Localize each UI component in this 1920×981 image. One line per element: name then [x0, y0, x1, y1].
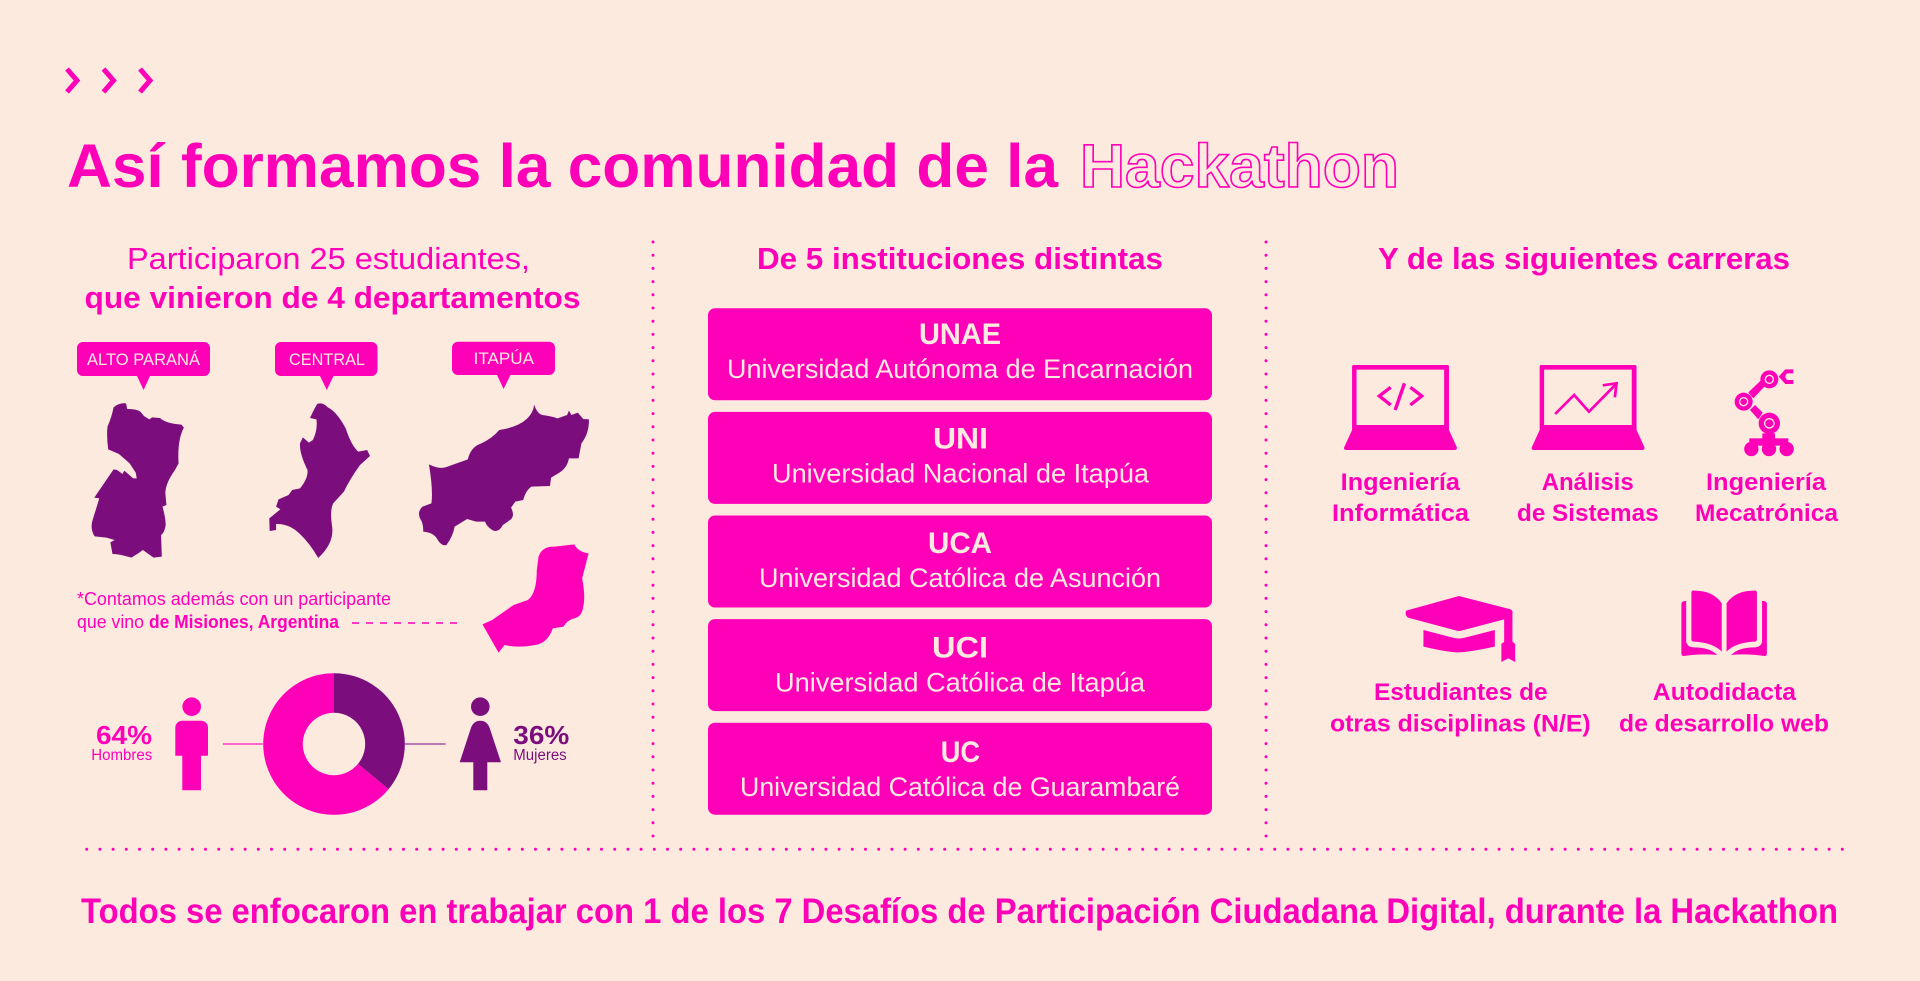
line: men connector [223, 743, 263, 745]
note: participant from Misiones: que vino [77, 612, 144, 632]
card: UNI [708, 412, 1212, 504]
heading: careers: Y de las siguientes carreras [1378, 241, 1790, 276]
callout: Central: CENTRAL [289, 350, 365, 369]
callout: Alto Paraná: ALTO PARANÁ [87, 350, 201, 369]
label: Autodidacta de desarrollo web: Autodidacta [1653, 679, 1797, 706]
card: UNAE: Universidad Autónoma de Encarnación [727, 354, 1193, 384]
card: UCI: UCI [932, 632, 988, 664]
map: Alto Paraná [92, 403, 184, 558]
card: UCI: Universidad Católica de Itapúa [775, 668, 1146, 698]
label: Ingeniería Mecatrónica [1695, 469, 1839, 527]
note: participant from Misiones: de Misiones, Argentina [149, 612, 340, 632]
stat: men 64% [91, 720, 153, 764]
stat: men 64%: 64% [96, 720, 152, 750]
card: UNI: UNI [933, 422, 988, 456]
icon: laptop with code [1344, 365, 1457, 450]
icon: graduation cap [1406, 596, 1515, 662]
callout: Alto Paraná [77, 342, 210, 390]
label: Ingeniería Mecatrónica: Mecatrónica [1695, 500, 1839, 527]
card: UC [708, 723, 1212, 815]
icon: woman [460, 697, 501, 790]
map: Central [269, 403, 370, 558]
panel: institutions [708, 241, 1212, 815]
donut chart [263, 673, 405, 815]
callout: Itapúa [452, 342, 555, 389]
icon: robot arm [1735, 369, 1794, 456]
label: Análisis de Sistemas: Análisis [1542, 469, 1634, 496]
note: participant from Misiones [77, 589, 458, 632]
label: Estudiantes de otras disciplinas: Estudiantes de [1374, 679, 1548, 706]
label: Ingeniería Mecatrónica: Ingeniería [1706, 469, 1827, 496]
card: UCA: UCA [928, 527, 992, 560]
heading: participants: que vinieron de 4 departamentos [84, 280, 580, 315]
stat: women 36%: Mujeres [513, 747, 567, 764]
card: UNI: Universidad Nacional de Itapúa [772, 458, 1150, 488]
icon: open book [1681, 591, 1767, 656]
card: UCA [708, 516, 1212, 608]
label: Ingeniería Informática: Ingeniería [1341, 469, 1461, 496]
icon: laptop with chart [1532, 365, 1645, 450]
label: Ingeniería Informática: Informática [1332, 500, 1470, 527]
stat: women 36%: 36% [513, 720, 569, 750]
label: Estudiantes de otras disciplinas: otras disciplinas (N/E) [1330, 710, 1591, 738]
callout: Itapúa: ITAPÚA [474, 349, 535, 368]
card: UC: Universidad Católica de Guarambaré [740, 772, 1180, 802]
card: UNAE [708, 308, 1212, 400]
title: Hackathon [1080, 132, 1399, 200]
heading: participants: Participaron 25 estudiantes, [127, 241, 530, 276]
label: Análisis de Sistemas [1517, 469, 1659, 527]
map: Itapúa [419, 405, 589, 545]
panel: participants [77, 241, 589, 815]
line: women connector [405, 743, 446, 745]
card: UC: UC [941, 736, 980, 769]
callout: Central [275, 342, 378, 390]
stat: women 36% [513, 720, 569, 764]
card: UNAE: UNAE [919, 318, 1001, 351]
note: participant from Misiones: *Contamos además con un participante [77, 589, 391, 609]
icon: three chevrons [67, 69, 150, 92]
heading: participants [84, 241, 580, 315]
icon: man [175, 697, 208, 790]
card: UCI [708, 619, 1212, 711]
heading: institutions: De 5 instituciones distintas [757, 241, 1163, 276]
card: UCA: Universidad Católica de Asunción [759, 563, 1161, 593]
label: Ingeniería Informática [1332, 469, 1470, 527]
label: Estudiantes de otras disciplinas [1330, 679, 1591, 738]
panel: careers [1330, 241, 1839, 738]
map: Misiones [482, 544, 589, 653]
stat: men 64%: Hombres [91, 747, 153, 764]
label: Análisis de Sistemas: de Sistemas [1517, 500, 1659, 527]
label: Autodidacta de desarrollo web [1619, 679, 1829, 738]
title: Así formamos la comunidad de la [67, 132, 1059, 200]
label: Autodidacta de desarrollo web: de desarrollo web [1619, 710, 1829, 738]
footer statement: Todos se enfocaron en trabajar con 1 de los 7 Desafíos de Participación Ciudadana Digital, durante la Hackathon [81, 892, 1838, 931]
